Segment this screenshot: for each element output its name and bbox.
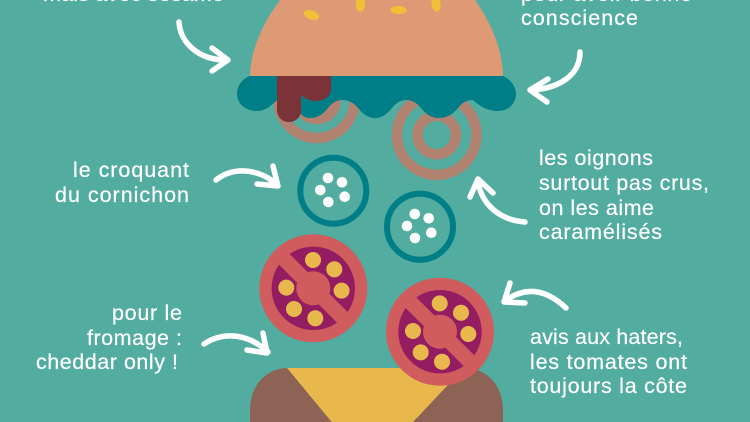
- arrow: conscience to lettuce: [530, 52, 580, 102]
- onion ring right: [397, 95, 477, 175]
- text: pickle: du cornichon: [55, 183, 189, 207]
- text: bun right: [521, 0, 692, 30]
- text: cheese: pour le: [112, 301, 182, 325]
- arrow: onions: [470, 179, 525, 222]
- bottom bun with cheese: [250, 368, 503, 422]
- text: onions: les oignons: [539, 146, 653, 170]
- text: pickle: le croquant: [73, 158, 189, 182]
- arrow: pickle: [216, 166, 278, 186]
- lettuce: [237, 76, 516, 118]
- text: onions: surtout pas crus,: [539, 171, 709, 195]
- text: onions: [539, 146, 709, 244]
- text: tomatoes: toujours la côte: [530, 374, 687, 398]
- text: cheese: [36, 301, 182, 374]
- tomato left: [259, 234, 367, 342]
- sauce drip: [277, 76, 331, 122]
- pickle slice left: [300, 158, 366, 224]
- tomato right: [386, 278, 494, 386]
- onion ring left: [279, 62, 355, 138]
- top bun: [250, 0, 503, 76]
- cheese: [287, 368, 464, 422]
- arrow: cheese: [204, 333, 268, 353]
- text: bun right: conscience: [521, 6, 638, 30]
- sesame seeds: [302, 0, 442, 22]
- text: cheese: fromage :: [87, 326, 182, 350]
- text: onions: on les aime: [539, 196, 654, 220]
- arrow: sesame to bun: [179, 22, 228, 71]
- arrow: tomatoes: [504, 283, 566, 308]
- text: tomatoes: les tomates ont: [530, 350, 687, 374]
- text: cheese: cheddar only !: [36, 350, 178, 374]
- text: onions: caramélisés: [539, 220, 662, 244]
- text: tomatoes: avis aux haters,: [530, 325, 683, 349]
- pickle slice right: [387, 194, 453, 260]
- text: pickle: [55, 158, 189, 207]
- text: tomatoes: [530, 325, 687, 398]
